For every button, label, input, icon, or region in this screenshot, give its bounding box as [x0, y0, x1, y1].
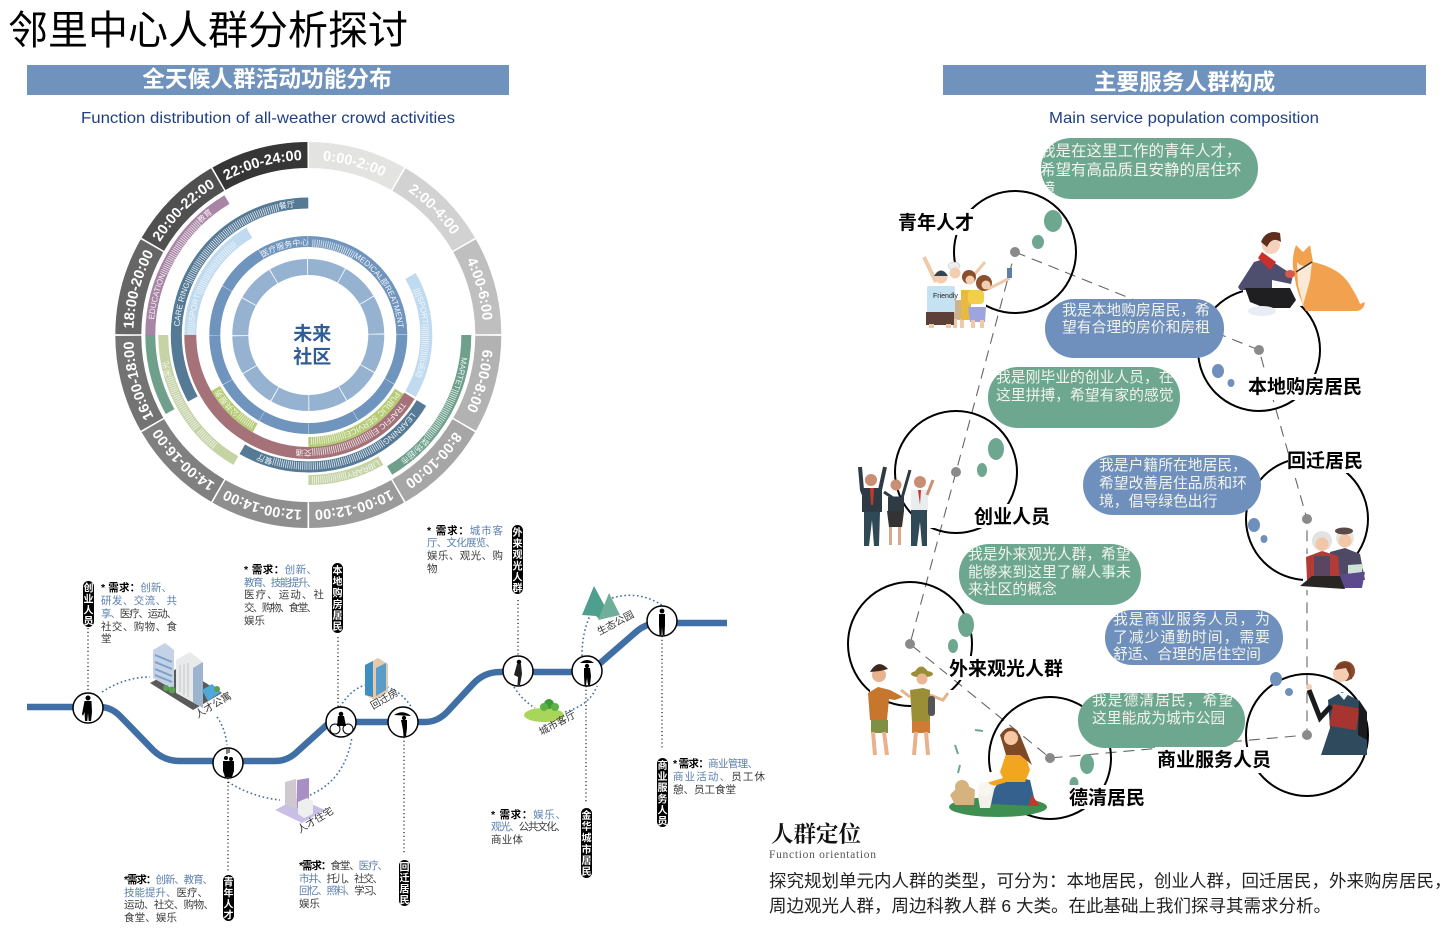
pill: startup worker: 员 [84, 616, 94, 628]
pill: city resident: 居 [582, 855, 592, 867]
text: local buyer needs: 交、购物、食堂、 [244, 601, 317, 614]
bubble: young talent: 我是在这里工作的青年人才， [1040, 142, 1242, 160]
pill: young talent: 人 [224, 898, 234, 910]
building: talent housing [275, 778, 325, 823]
blue service ring [180, 207, 436, 463]
text: visitor needs: 娱乐、观光、购 [427, 549, 503, 562]
pill: returning resident: 居 [400, 884, 410, 896]
text: service worker needs: * 需求：商业管理、 [673, 757, 758, 770]
bubble: Deqing resident: 这里能成为城市公园 [1092, 710, 1225, 727]
bubble: startup worker: 这里拼搏，希望有家的感觉 [996, 387, 1174, 404]
time labels: 16:00-18:00 [124, 342, 154, 420]
labels: 商业服务人员 [1157, 749, 1271, 771]
pill: visitor: 来 [512, 537, 522, 550]
time labels: 0:00-2:00 [324, 151, 386, 176]
text: startup worker needs [101, 581, 178, 645]
pill: city resident [581, 808, 592, 878]
text: visitor needs: 厅、文化展览、 [427, 536, 496, 549]
bubble: visitor [959, 544, 1141, 605]
text: service worker needs [673, 757, 766, 796]
center label: 未来 [293, 323, 331, 345]
node: returning resident [388, 707, 418, 737]
bubble: local buyer: 望有合理的房价和房租 [1062, 319, 1210, 336]
pill: service worker: 员 [658, 816, 668, 828]
dashed network [910, 252, 1307, 758]
pill: service worker: 务 [658, 792, 668, 806]
time labels: 8:00-10:00 [406, 432, 462, 488]
dotted stems [88, 600, 662, 872]
illustration: young talent group [924, 257, 1012, 328]
pill: returning resident [399, 860, 410, 906]
pill: service worker: 业 [658, 770, 668, 783]
activity arcs [94, 120, 523, 550]
illustration: local buyer with dog [1238, 232, 1365, 316]
ring labels: ||||||||||| ||||||||||||||||||||||||||||采光 [162, 361, 218, 449]
label: city living room: 城市客厅 [537, 708, 578, 738]
time labels: 6:00-8:00 [468, 350, 492, 412]
bubble: young talent: 境 [1040, 179, 1056, 198]
heading: left banner: 全天候人群活动功能分布 [142, 66, 392, 92]
pill: visitor: 光 [512, 560, 522, 572]
pill: startup worker: 业 [84, 592, 94, 606]
text: startup worker needs: 享、医疗、运动、 [101, 607, 177, 620]
pill: local buyer: 购 [332, 586, 342, 600]
subtitle: function orientation: Function orientation [769, 849, 876, 861]
timeline route [27, 623, 727, 761]
ring labels: LEARNING|||||||||||||||||||||||||||||||||||||||||||||||||||||||餐厅 [256, 412, 416, 470]
pill: returning resident: 迁 [400, 872, 410, 884]
pill: local buyer: 居 [332, 610, 342, 622]
labels: 德清居民 [1069, 786, 1145, 809]
time labels: 4:00-6:00 [468, 258, 492, 320]
pill: local buyer [332, 563, 343, 633]
text: local buyer needs: * 需求：创新、 [244, 563, 317, 576]
text: visitor needs: * 需求：城市客 [427, 524, 504, 537]
text: young talent needs: 食堂、娱乐 [124, 911, 178, 924]
text: local buyer needs: 教育、技能提升、 [244, 576, 317, 589]
ring labels [148, 200, 468, 484]
center label [293, 323, 331, 368]
pill: city resident: 金 [582, 809, 592, 822]
bubble: service worker [1105, 610, 1283, 665]
pill: visitor: 群 [512, 582, 522, 594]
heading: right banner [943, 65, 1426, 95]
node: startup worker [73, 693, 103, 723]
text: returning resident needs: 市井、托儿、社交、 [299, 872, 383, 885]
pill: local buyer: 本 [332, 564, 342, 577]
building: relocation housing [365, 658, 388, 700]
bubble: Deqing resident: 我是德清居民，希望 [1092, 691, 1234, 709]
ring labels: 医疗服务中心 [260, 238, 308, 258]
paragraph: 周边观光人群，周边科教人群 6 大类。在此基础上我们探寻其需求分析。 [769, 896, 1331, 916]
text: city resident needs: 观光、公共文化、 [491, 820, 566, 833]
inner ring [240, 267, 376, 403]
heading: right banner: 主要服务人群构成 [1094, 69, 1275, 95]
text: startup worker needs: * 需求：创新、 [101, 581, 172, 594]
network nodes [905, 247, 1312, 763]
ring labels: TRAFFIC E|||||||||||||||||||||||||||||||交通 [296, 403, 406, 457]
heading: crowd orientation: 人群定位 [771, 822, 861, 847]
bubble: local buyer: 我是本地购房居民，希 [1062, 302, 1210, 319]
bubble: visitor: 来社区的概念 [968, 580, 1057, 598]
label: talent apartment: 人才公寓 [193, 689, 234, 721]
white masks behind labels and illustrations [870, 209, 1366, 818]
pill: startup worker: 创 [84, 582, 94, 594]
pill: visitor: 人 [512, 572, 522, 584]
bubble: visitor: 我是外来观光人群，希望 [968, 546, 1131, 563]
text: visitor needs [427, 524, 504, 575]
pill: local buyer: 地 [332, 575, 342, 588]
ring labels: ||||||SPORT|||||||||||||||||||||||||||||| [188, 241, 237, 334]
text: local buyer needs: 娱乐 [244, 614, 265, 627]
illustration: service worker [1306, 661, 1367, 755]
decorative dots [948, 210, 1293, 789]
time labels: 10:00-12:00 [315, 490, 394, 520]
node: service worker [647, 606, 677, 636]
text: service worker needs: 憩、员工食堂 [673, 783, 736, 796]
bubble: returning resident [1083, 455, 1261, 515]
pill: service worker: 服 [658, 782, 668, 794]
building: talent apartment [150, 643, 222, 710]
text: local buyer needs [244, 563, 324, 627]
time labels [124, 150, 492, 520]
heading: left banner [27, 65, 509, 95]
bubble: young talent: 希望有高品质且安静的居住环 [1040, 161, 1242, 179]
center label: 社区 [293, 345, 331, 368]
subtitle: right: Main service population composition [1049, 110, 1319, 127]
pill: startup worker [83, 581, 94, 628]
bubble: service worker: 了减少通勤时间，需要 [1113, 629, 1271, 646]
ring labels: EDUCATION||||||||||||||||||||||||||||||教育 [148, 208, 212, 319]
persona circles [848, 191, 1368, 819]
pill: city resident: 市 [582, 843, 592, 856]
text: city resident needs: * 需求：娱乐、 [491, 808, 566, 821]
subtitle: left: Function distribution of all-weather crowd activities [81, 110, 455, 127]
pill: city resident: 华 [582, 820, 592, 833]
pill: young talent: 年 [224, 886, 234, 900]
labels: 青年人才 [898, 211, 974, 234]
node: visitor [503, 656, 533, 686]
pill: city resident: 民 [582, 866, 592, 878]
ring labels: |||||||||||||||||||||MEDICAL部REATMENT [312, 239, 404, 328]
pill: local buyer: 房 [332, 598, 342, 611]
text: young talent needs: 运动、社交、购物、 [124, 898, 214, 911]
text: returning resident needs: 回忆、照料、学习、 [299, 884, 383, 897]
labels [898, 211, 1363, 809]
text: young talent needs: *需求：创新、教育、 [124, 873, 213, 886]
bubble: visitor: 能够来到这里了解人事未 [968, 564, 1131, 581]
labels: 本地购房居民 [1248, 376, 1362, 398]
paragraph [769, 871, 1448, 916]
bubble: service worker: 我是商业服务人员，为 [1113, 611, 1271, 628]
pill: startup worker: 人 [84, 604, 94, 616]
node: city resident with umbrella [572, 656, 602, 686]
pill: returning resident: 回 [400, 862, 410, 874]
illustration: Deqing resident with dogs [949, 728, 1047, 817]
illustration: startup team [860, 467, 933, 546]
bubble: Deqing resident [1078, 691, 1245, 748]
radial chart: all-weather activity distribution [115, 142, 502, 528]
text: returning resident needs [299, 859, 388, 910]
ring labels: ||||SPORT||||||||||||||||||运动 [412, 288, 430, 378]
title: 邻里中心人群分析探讨 [8, 9, 408, 53]
label: talent housing: 人才住宅 [295, 804, 336, 836]
text: service worker needs: 商业活动、员工休 [673, 770, 766, 783]
illustration: returning elderly couple [1300, 528, 1365, 589]
pill: visitor [512, 525, 523, 594]
text: startup worker needs: 堂 [101, 633, 112, 645]
text: startup worker needs: 研发、交流、共 [101, 594, 178, 607]
time labels: 20:00-22:00 [152, 180, 214, 242]
illustration: young talent group: Friendly [933, 293, 958, 300]
node: young talent [213, 748, 243, 778]
paragraph: 探究规划单元内人群的类型，可分为：本地居民，创业人群，回迁居民，外来购房居民， [769, 871, 1448, 891]
bubble: startup worker: 我是刚毕业的创业人员，在 [996, 369, 1174, 386]
text: young talent needs: 技能提升、医疗、 [124, 886, 208, 899]
bubble: startup worker [988, 367, 1180, 428]
pill: young talent [223, 875, 234, 922]
outer time ring [62, 89, 554, 581]
time labels: 14:00-16:00 [153, 430, 215, 490]
text: startup worker needs: 社交、购物、食 [101, 620, 178, 633]
label: relocation housing: 回迁房 [368, 686, 400, 712]
bubble: local buyer [1045, 299, 1224, 358]
bubble: returning resident: 希望改善居住品质和环 [1099, 475, 1247, 492]
bubble: service worker: 舒适、合理的居住空间 [1113, 646, 1261, 663]
pill: visitor: 观 [512, 549, 522, 561]
ring labels: LIBRARY||||||||||||||||| [312, 460, 380, 484]
pill: service worker: 人 [658, 804, 668, 816]
pill: city resident: 城 [582, 832, 592, 844]
bubble: young talent [1040, 138, 1258, 199]
labels: 回迁居民 [1287, 450, 1363, 472]
ring labels: MARTET|||||||||||||||||||||||||||菜场/超市 [401, 358, 468, 464]
text: returning resident needs: 娱乐 [299, 897, 320, 910]
bubble: returning resident: 我是户籍所在地居民， [1099, 457, 1247, 474]
node: local buyer on bicycle [326, 707, 356, 737]
time labels: 18:00-20:00 [124, 250, 152, 328]
dotted connector curves [102, 595, 663, 800]
ring labels: PUBLIC SERVICE||||||||||||||||| [311, 392, 400, 445]
time labels: 22:00-24:00 [223, 150, 302, 180]
text: city resident needs [491, 808, 566, 846]
pill: young talent: 才 [224, 908, 234, 922]
labels: 外来观光人群 [949, 658, 1063, 680]
text: city resident needs: 商业体 [491, 833, 524, 846]
pill: service worker [657, 758, 668, 828]
text: returning resident needs: *需求：食堂、医疗、 [299, 859, 388, 872]
pill: returning resident: 民 [400, 894, 410, 906]
pill: service worker: 商 [658, 759, 668, 772]
time labels: 2:00-4:00 [408, 184, 459, 234]
ring labels: CARE RING||||||||||||||||||||||||||||||||||||||||||||||||||||||||||餐厅 [174, 200, 294, 326]
ring labels: |||||||||公共服务 [214, 390, 255, 429]
labels: 创业人员 [974, 506, 1050, 528]
text: young talent needs [124, 873, 214, 924]
pill: visitor: 外 [512, 526, 522, 539]
pill: local buyer: 民 [332, 621, 342, 633]
text: visitor needs: 物 [427, 562, 438, 575]
illustration: visitors [868, 664, 948, 755]
mountains: ecological park [582, 586, 620, 620]
label: ecological park: 生态公园 [595, 608, 636, 638]
text: local buyer needs: 医疗、运动、社 [244, 588, 324, 601]
bubble: returning resident: 境，倡导绿色出行 [1099, 492, 1218, 510]
time labels: 12:00-14:00 [224, 491, 302, 520]
park: city living room [524, 699, 564, 722]
pill: young talent: 青 [224, 876, 234, 888]
